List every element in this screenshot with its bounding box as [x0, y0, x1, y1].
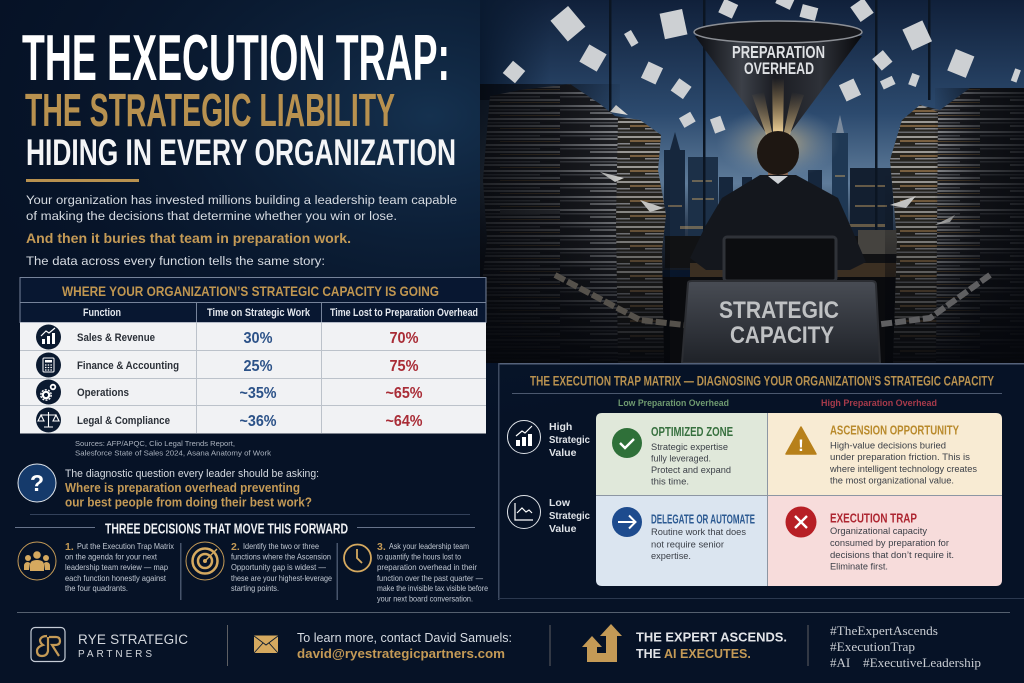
table rows: 30% [244, 330, 272, 347]
right paper stacks [885, 88, 1024, 363]
plaque: Strategic Capacity: CAPACITY [730, 322, 834, 349]
decision 1: 1. [65, 541, 74, 553]
left paper stacks [480, 84, 670, 363]
column headers: Time on Strategic Work [207, 307, 310, 319]
quadrant: execution trap: consumed by preparation for [830, 538, 950, 549]
row label: high strategic value: Strategic [549, 434, 590, 446]
office window and skyline [480, 0, 1024, 270]
decision 3: make the invisible tax visible before [377, 583, 488, 593]
decision 1: the four quadrants. [65, 583, 128, 593]
intro text: of making the decisions that determine whether you win or lose. [26, 209, 397, 223]
contact: david@ryestrategicpartners.com [297, 646, 505, 661]
title block: HIDING IN EVERY ORGANIZATION [26, 131, 456, 173]
chains [555, 275, 990, 327]
quadrant: execution trap: EXECUTION TRAP [830, 512, 917, 526]
table rows: Sales & Revenue [77, 332, 155, 344]
decision 3: to quantify the hours lost to [377, 552, 461, 562]
quadrant: optimized zone: OPTIMIZED ZONE [651, 425, 733, 439]
table heading: WHERE YOUR ORGANIZATION’S STRATEGIC CAPACITY IS GOING [62, 283, 439, 299]
decision 3: preparation overhead in their [377, 562, 477, 572]
icon: team [18, 542, 56, 580]
logo: Rye Strategic Partners [31, 628, 188, 662]
icon: ascending arrows [582, 624, 622, 662]
icon: sales chart [36, 324, 61, 350]
table rows: Legal & Compliance [77, 415, 170, 427]
logo: Rye Strategic Partners: RYE STRATEGIC [78, 632, 188, 647]
title block [22, 21, 456, 182]
table rows: Finance & Accounting [77, 360, 179, 372]
decision 3 [344, 541, 488, 604]
table sources: Sources: AFP/APQC, Clio Legal Trends Report, [75, 439, 235, 448]
table rows: 75% [390, 358, 418, 375]
quadrant: ascension opportunity: ASCENSION OPPORTUNITY [830, 424, 960, 438]
decision 1: on the agenda for your next [65, 552, 158, 562]
icon: gears [36, 380, 61, 404]
decision 1 [18, 541, 175, 593]
callout: diagnostic question [18, 464, 319, 510]
decision 1: leadership team review — map [65, 562, 168, 572]
table rows [20, 322, 486, 434]
panel: execution trap matrix [498, 363, 1024, 600]
quadrant: optimized zone [596, 413, 767, 495]
footer [17, 612, 1010, 670]
table sources: Salesforce State of Sales 2024, Asana Anatomy of Work [75, 448, 271, 458]
column headers: Function [83, 307, 121, 319]
callout: diagnostic question: our best people from doing their best work? [65, 496, 312, 510]
intro text: And then it buries that team in preparation work. [26, 231, 351, 246]
row label: high strategic value: Value [549, 447, 577, 459]
table rows: ~65% [386, 385, 422, 402]
table rows: 70% [390, 330, 418, 347]
quadrant: optimized zone: Protect and expand [651, 465, 731, 476]
table rows: ~35% [240, 385, 276, 402]
quadrant: delegate or automate: not require senior [651, 540, 725, 550]
column headers: Time Lost to Preparation Overhead [330, 307, 478, 319]
decision 2 [186, 541, 332, 593]
icon: target [186, 542, 224, 580]
quadrant: delegate or automate: expertise. [651, 551, 691, 562]
decision 1: Put the Execution Trap Matrix [77, 541, 175, 551]
icon: clock [344, 544, 371, 572]
tagline: THE AI EXECUTES. [636, 647, 751, 661]
decision 2: starting points. [231, 583, 279, 593]
heading: three decisions: THREE DECISIONS THAT MOVE THIS FORWARD [105, 522, 348, 538]
hashtags: #TheExpertAscends [830, 623, 938, 638]
quadrant: execution trap: Eliminate first. [830, 562, 888, 572]
table rows: Operations [77, 387, 129, 399]
tagline: THE EXPERT ASCENDS. [636, 630, 787, 644]
row label: low strategic value: Low [549, 497, 571, 509]
quadrant: delegate or automate: DELEGATE OR AUTOMATE [651, 512, 755, 526]
logo: Rye Strategic Partners: PARTNERS [78, 649, 152, 660]
desk [660, 230, 905, 363]
quadrant: ascension opportunity: where intelligent technology creates [829, 464, 977, 475]
icon: scales [36, 408, 61, 432]
column labels [618, 398, 937, 409]
quadrant: execution trap [767, 496, 1002, 586]
funnel labelled Preparation Overhead: OVERHEAD [744, 59, 814, 78]
quadrant: execution trap: decisions that don’t require it. [830, 550, 954, 561]
decision 1: each function honestly against [65, 573, 167, 583]
table: strategic capacity by function [20, 278, 486, 434]
contact [254, 630, 512, 661]
decision 2: 2. [231, 541, 240, 553]
quadrant: ascension opportunity: the most organizational value. [830, 476, 954, 486]
intro text: Your organization has invested millions building a leadership team capable [26, 193, 457, 207]
businessman from behind [690, 131, 866, 281]
row label: high strategic value: High [549, 421, 572, 433]
plaque: Strategic Capacity [682, 281, 880, 363]
icon: calculator [36, 352, 61, 378]
quadrant: ascension opportunity: High-value decisions buried [830, 440, 946, 452]
decision 3: 3. [377, 541, 386, 553]
funnel labelled Preparation Overhead: PREPARATION [732, 42, 825, 62]
quadrant: execution trap: Organizational capacity [830, 526, 927, 537]
title block: THE EXECUTION TRAP: [22, 21, 450, 94]
title block: THE STRATEGIC LIABILITY [25, 84, 395, 136]
row label: low strategic value [508, 496, 590, 535]
decision 2: Opportunity gap is widest — [231, 562, 327, 572]
quadrant: optimized zone: fully leveraged. [651, 454, 711, 464]
hero illustration [480, 0, 1024, 363]
tagline [636, 630, 787, 661]
decision 2: functions where the Ascension [231, 552, 331, 562]
decision 2: these are your highest-leverage [231, 573, 332, 583]
quadrant: ascension opportunity [767, 413, 1002, 495]
decision 3: your next board conversation. [377, 594, 473, 604]
decision 3: function over the past quarter — [377, 573, 484, 583]
callout: diagnostic question: ? [30, 470, 44, 496]
table rows: 25% [244, 358, 272, 375]
intro text [26, 193, 457, 268]
table sources [75, 439, 271, 458]
icon: envelope [254, 636, 278, 653]
hashtags: #ExecutionTrap [830, 639, 915, 654]
quadrant: ascension opportunity: under preparation friction. This is [830, 452, 970, 463]
quadrant: optimized zone: Strategic expertise [651, 442, 728, 453]
column labels: Low Preparation Overhead [618, 398, 729, 409]
decision 2: Identify the two or three [243, 541, 319, 551]
table rows: ~36% [240, 413, 276, 430]
quadrant: delegate or automate [596, 496, 767, 586]
table rows: ~64% [386, 413, 422, 430]
hashtags: #AI [830, 655, 850, 670]
hashtags [830, 623, 981, 670]
contact: To learn more, contact David Samuels: [297, 630, 512, 645]
funnel labelled Preparation Overhead [694, 21, 862, 137]
flying papers [503, 0, 1021, 134]
quadrant: delegate or automate: Routine work that does [651, 527, 746, 538]
quadrant: ascension opportunity: ! [798, 436, 804, 455]
row label: low strategic value: Value [549, 523, 577, 535]
row label: low strategic value: Strategic [549, 510, 590, 522]
intro text: The data across every function tells the same story: [26, 254, 325, 268]
row label: high strategic value [508, 420, 590, 459]
callout: diagnostic question: Where is preparation overhead preventing [65, 481, 300, 495]
hashtags: #ExecutiveLeadership [863, 655, 981, 670]
column headers [83, 307, 478, 319]
decision 3: Ask your leadership team [389, 541, 469, 551]
quadrant: optimized zone: this time. [651, 476, 689, 488]
plaque: Strategic Capacity: STRATEGIC [719, 297, 839, 324]
column labels: High Preparation Overhead [821, 398, 937, 409]
callout: diagnostic question: The diagnostic question every leader should be asking: [65, 468, 319, 480]
